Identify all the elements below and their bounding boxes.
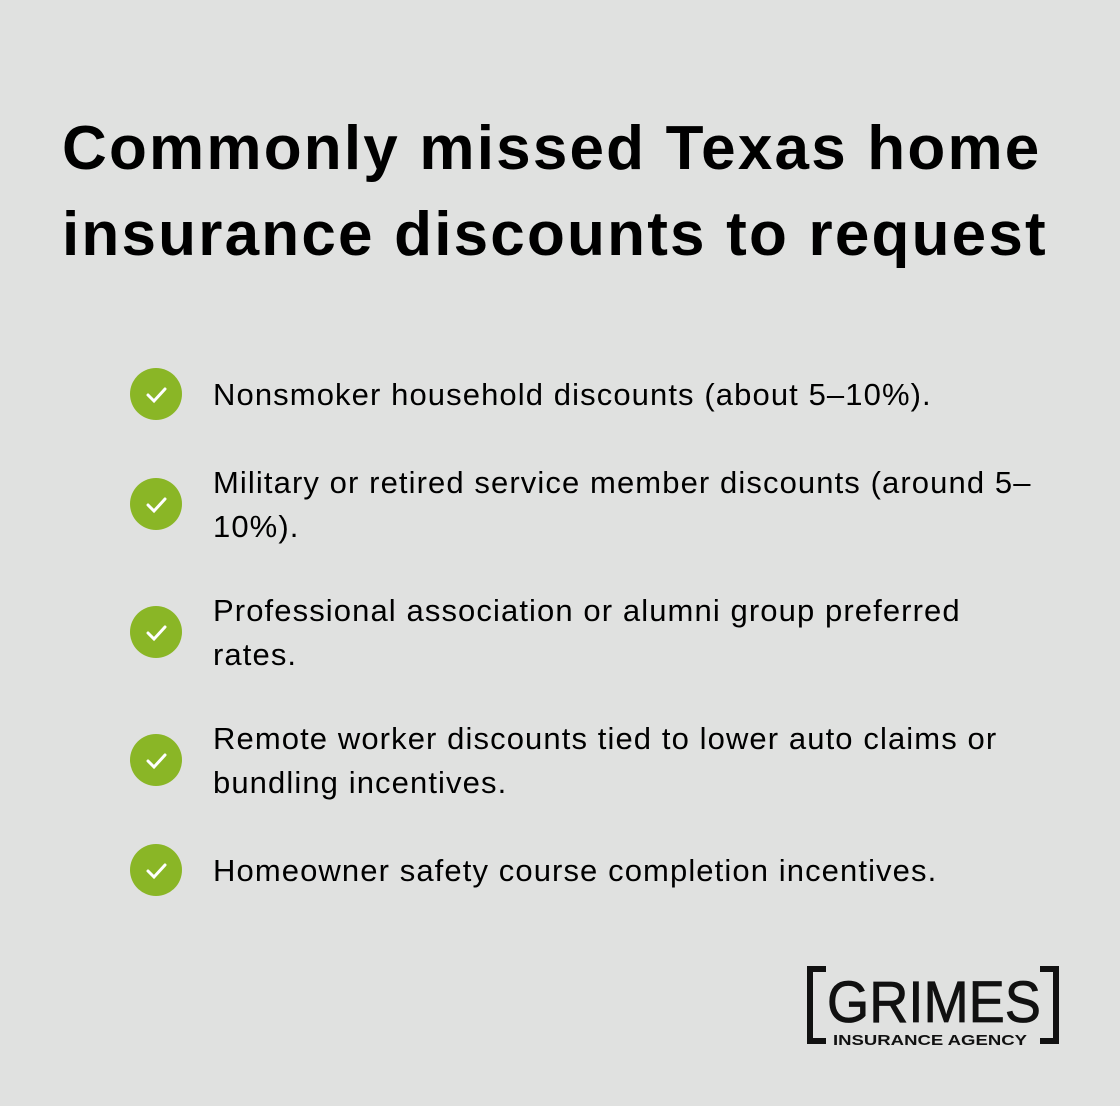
- text: Nonsmoker household discounts (about 5–10%).: [213, 377, 932, 412]
- text: [213, 465, 1032, 544]
- item 3: [130, 593, 961, 672]
- icon: check: [130, 368, 182, 420]
- item 4: [130, 721, 997, 800]
- title: [62, 114, 1048, 269]
- title: Commonly missed Texas home: [62, 114, 1041, 183]
- text: [213, 721, 997, 800]
- icon: check: [130, 734, 182, 786]
- text: [213, 593, 961, 672]
- logo: GRIMES: [827, 970, 1041, 1035]
- item 5: [130, 844, 937, 896]
- icon: check: [130, 606, 182, 658]
- icon: check: [130, 478, 182, 530]
- text: 10%).: [213, 509, 299, 544]
- text: rates.: [213, 637, 297, 672]
- title: insurance discounts to request: [62, 200, 1048, 269]
- text: Military or retired service member discounts (around 5–: [213, 465, 1032, 500]
- item 1: [130, 368, 932, 420]
- item 2: [130, 465, 1032, 544]
- icon: check: [130, 844, 182, 896]
- text: Remote worker discounts tied to lower auto claims or: [213, 721, 997, 756]
- text: bundling incentives.: [213, 765, 507, 800]
- text: Homeowner safety course completion incentives.: [213, 853, 937, 888]
- text: Professional association or alumni group preferred: [213, 593, 961, 628]
